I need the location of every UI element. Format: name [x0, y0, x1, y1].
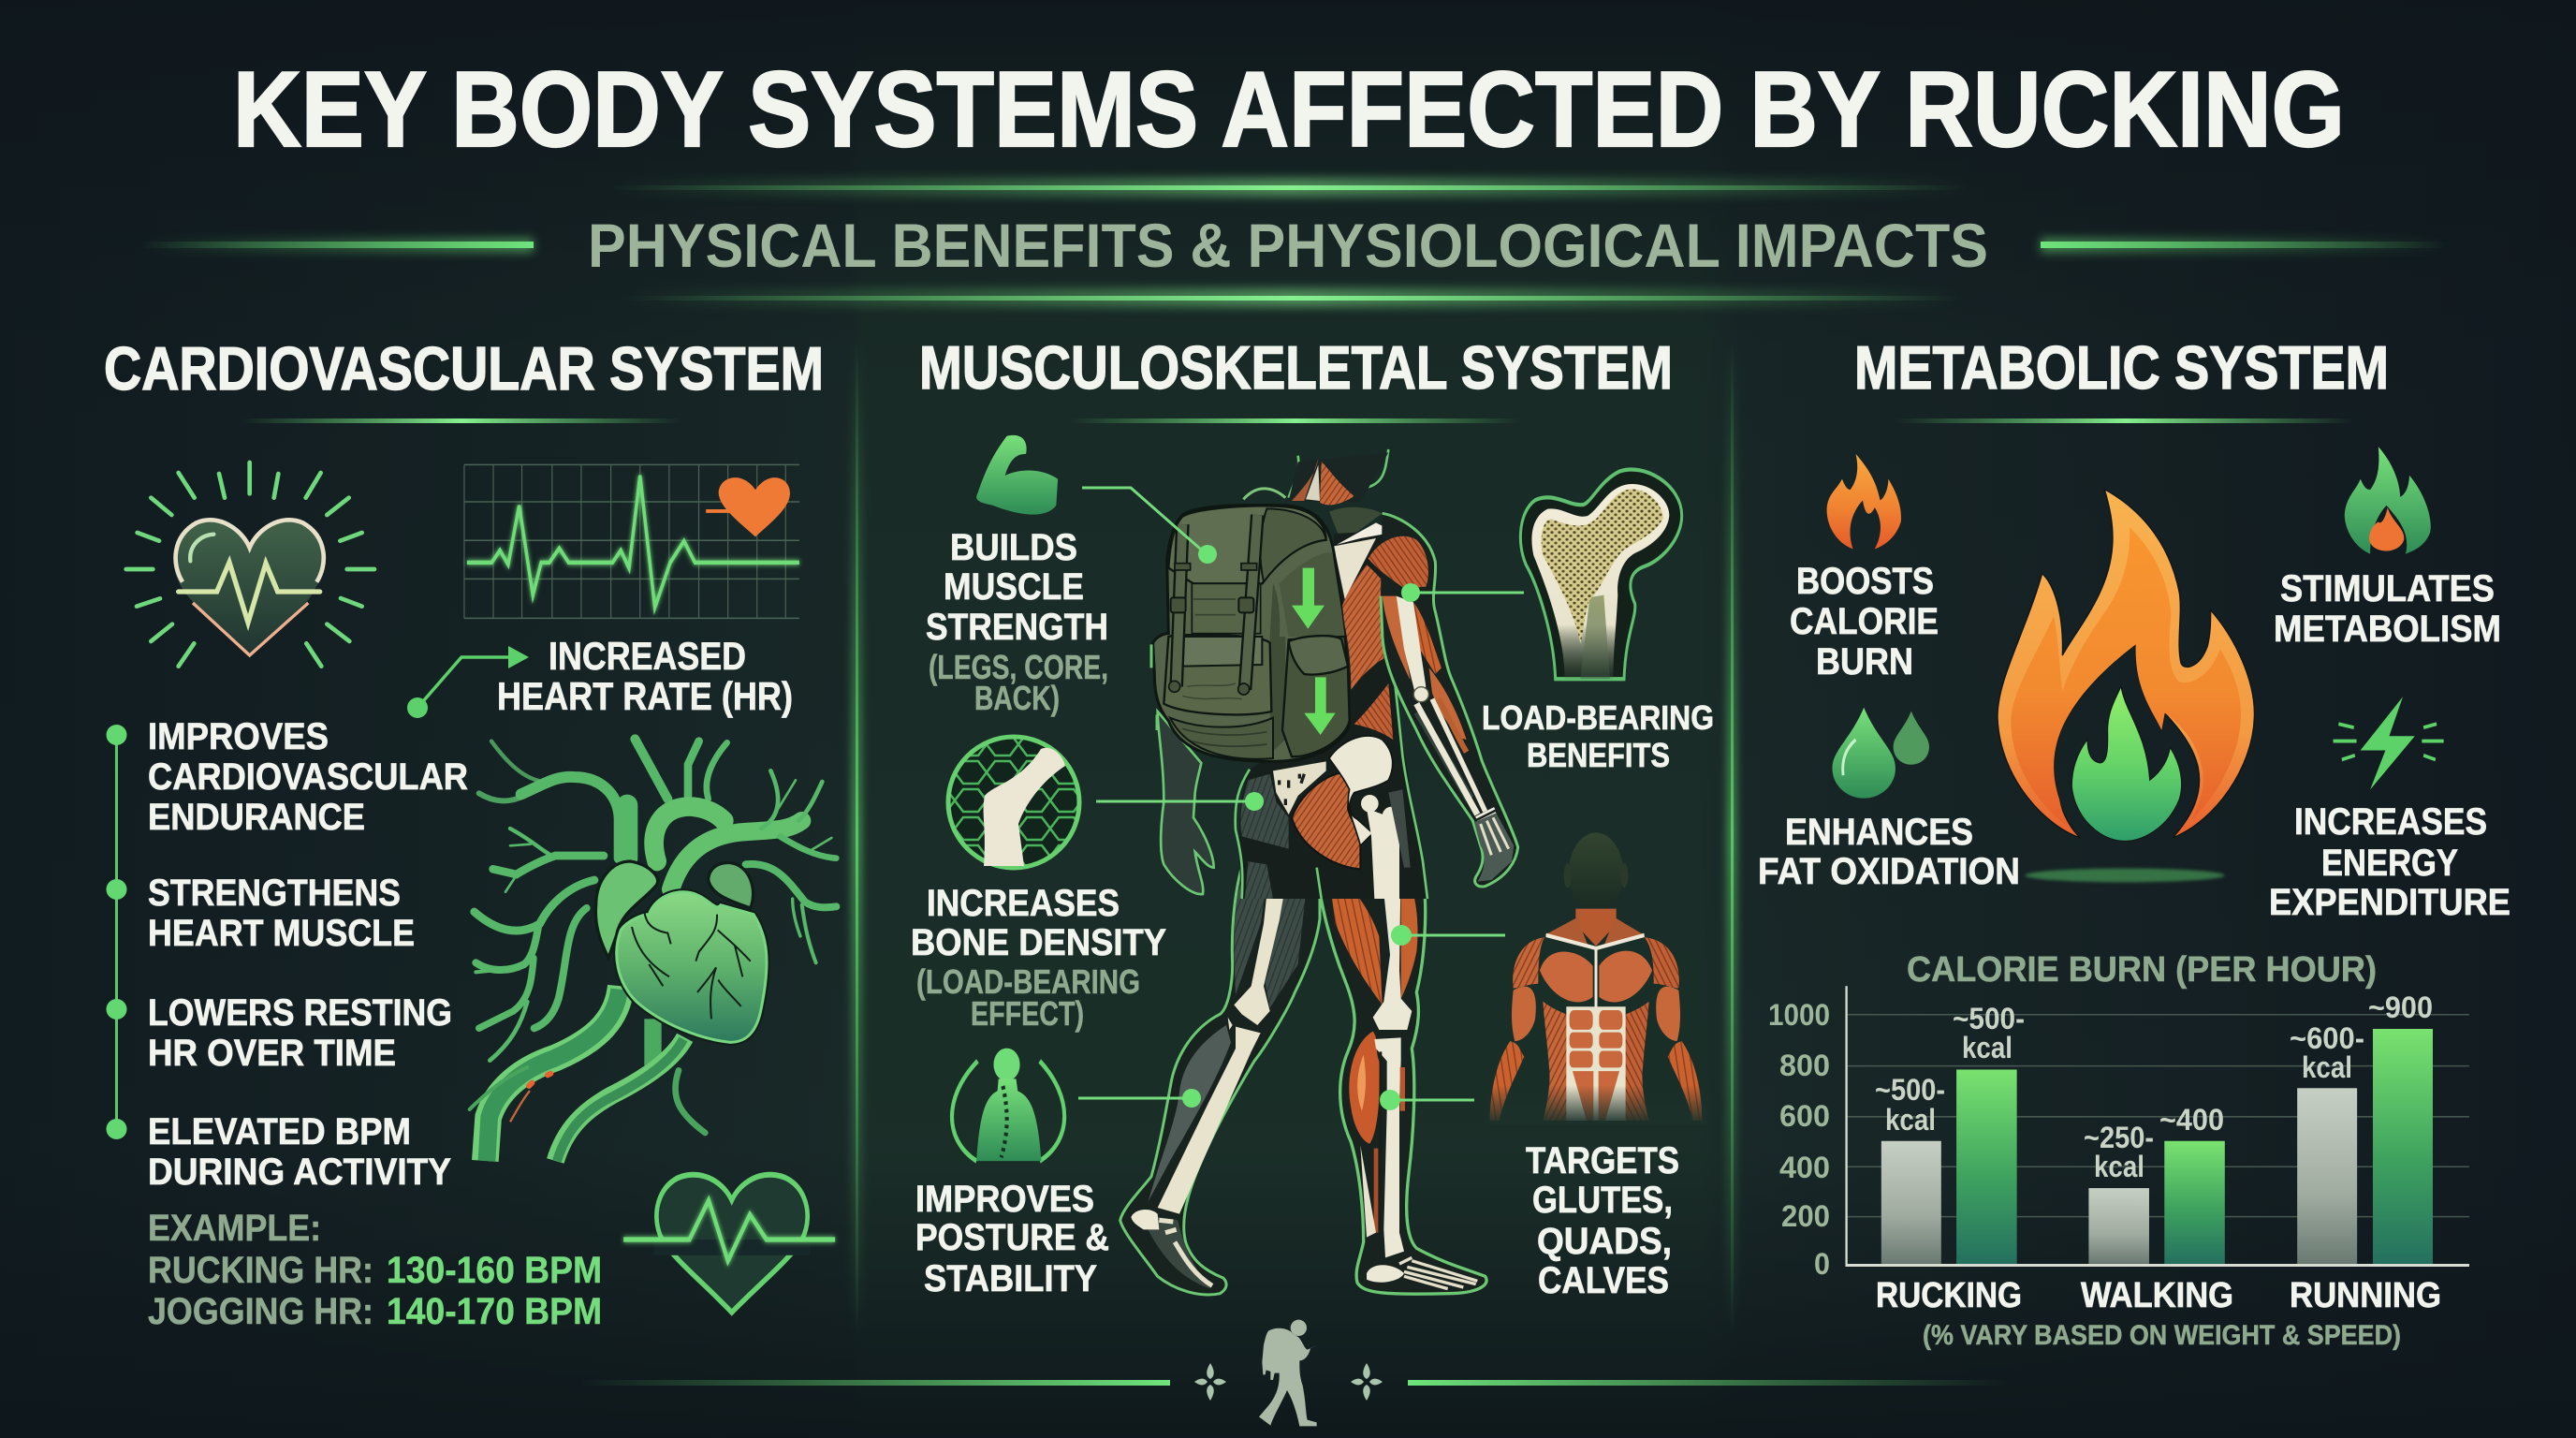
text: increases energy expenditure: EXPENDITURE: [2269, 882, 2510, 923]
text: improves cardiovascular endurance: ENDURANCE: [148, 797, 365, 838]
example heart rates: [148, 1208, 602, 1332]
example heart rates: 140-170 BPM: [387, 1291, 602, 1332]
example heart rates: EXAMPLE:: [148, 1208, 321, 1249]
callout lines and dots: [1078, 488, 1524, 1110]
text: increases energy expenditure: [2269, 801, 2510, 923]
text: increases bone density: (LOAD-BEARING: [916, 962, 1140, 1001]
text: improves posture and stability: [915, 1179, 1109, 1299]
chart: calorie burn per hour: [1768, 986, 2469, 1315]
text: stimulates metabolism: STIMULATES: [2280, 568, 2495, 609]
text: increases bone density: BONE DENSITY: [911, 922, 1166, 963]
text: load-bearing benefits: BENEFITS: [1527, 736, 1670, 774]
text: strengthens heart muscle: [148, 873, 415, 954]
icon: bone density circle: [948, 737, 1079, 868]
text: boosts calorie burn: [1790, 561, 1939, 682]
text: stimulates metabolism: METABOLISM: [2274, 609, 2501, 650]
text: builds muscle strength: MUSCLE: [944, 566, 1084, 608]
icon: lightning bolt: [2334, 697, 2444, 789]
y axis labels: [1768, 998, 1830, 1281]
illustration: anatomical heart with vessels: [470, 739, 836, 1161]
heading: musculoskeletal: MUSCULOSKELETAL SYSTEM: [919, 333, 1673, 402]
text: builds muscle strength: STRENGTH: [926, 607, 1108, 648]
lower glowing divider: [624, 288, 1963, 307]
text: load-bearing benefits: LOAD-BEARING: [1482, 698, 1714, 737]
icon: posture spine figure: [952, 1049, 1064, 1161]
text: elevated bpm: ELEVATED BPM: [148, 1111, 411, 1152]
y axis labels: 0: [1814, 1247, 1830, 1281]
text: improves posture and stability: STABILITY: [924, 1258, 1097, 1299]
icon: fat droplets: [1832, 708, 1929, 799]
icon: large flame: [1998, 490, 2254, 882]
text: enhances fat oxidation: ENHANCES: [1785, 812, 1973, 853]
label: increased heart rate: INCREASED: [549, 634, 746, 678]
y axis labels: 1000: [1768, 998, 1830, 1032]
text: strengthens heart muscle: STRENGTHENS: [148, 873, 401, 914]
bar value labels: kcal: [2094, 1150, 2144, 1183]
x axis labels: RUNNING: [2290, 1276, 2441, 1315]
bar value labels: ~900: [2368, 990, 2433, 1024]
x axis labels: RUCKING: [1876, 1276, 2022, 1315]
lower body: legs: [1120, 861, 1486, 1295]
heading divider: [1070, 418, 1520, 423]
bar value labels: kcal: [1885, 1103, 1936, 1137]
panel: musculoskeletal system: [911, 333, 1714, 1301]
text: elevated bpm: DURING ACTIVITY: [148, 1152, 451, 1193]
y axis labels: 600: [1779, 1099, 1830, 1133]
icon: heart pulse: [623, 1175, 835, 1313]
label: increased heart rate: HEART RATE (HR): [497, 674, 793, 718]
chart title: CALORIE BURN (PER HOUR): [1907, 950, 2377, 990]
text: boosts calorie burn: CALORIE: [1790, 601, 1939, 642]
text: increases bone density: INCREASES: [927, 883, 1120, 924]
upper body: neck, torso, arms, pelvis: [1158, 449, 1518, 899]
text: increases bone density: [911, 883, 1166, 1033]
text: lowers resting hr: LOWERS RESTING: [148, 992, 452, 1034]
y axis labels: 400: [1779, 1151, 1830, 1184]
text: elevated bpm: [148, 1111, 451, 1193]
chart axes and bars: [1847, 986, 2469, 1265]
text: builds muscle strength: [926, 527, 1108, 717]
title: KEY BODY SYSTEMS AFFECTED BY RUCKING: [233, 51, 2345, 169]
text: improves cardiovascular endurance: CARDIOVASCULAR: [148, 756, 468, 798]
icon: right sparkle: [1351, 1363, 1383, 1401]
text: increases energy expenditure: INCREASES: [2294, 801, 2487, 843]
text: improves cardiovascular endurance: IMPROVES: [148, 716, 329, 757]
heading divider: [242, 418, 681, 423]
text: builds muscle strength: (LEGS, CORE,: [929, 648, 1108, 686]
icon: small orange flame: [1827, 454, 1901, 549]
text: lowers resting hr: [148, 992, 452, 1074]
x axis labels: [1876, 1276, 2441, 1315]
illustration: femur cross-section: [1520, 469, 1682, 679]
text: improves cardiovascular endurance: [148, 716, 468, 838]
text: targets glutes quads calves: TARGETS: [1526, 1140, 1679, 1181]
bar value labels: ~500-: [1875, 1073, 1945, 1107]
panel: cardiovascular system: [104, 334, 836, 1332]
footer rule left: [580, 1380, 1170, 1386]
right subtitle rule: [2041, 238, 2448, 253]
icon: left sparkle: [1194, 1363, 1226, 1401]
bar value labels: ~600-: [2290, 1021, 2364, 1055]
text: enhances fat oxidation: FAT OXIDATION: [1758, 851, 2020, 892]
text: improves posture and stability: POSTURE &: [915, 1217, 1109, 1258]
subtitle: PHYSICAL BENEFITS & PHYSIOLOGICAL IMPACTS: [588, 211, 1988, 280]
bar value labels: ~250-: [2084, 1121, 2154, 1154]
icon: hiker silhouette: [1259, 1320, 1318, 1426]
text: load-bearing benefits: [1482, 698, 1714, 774]
example heart rates: JOGGING HR:: [148, 1291, 373, 1332]
text: builds muscle strength: BUILDS: [950, 527, 1077, 568]
bar value labels: ~400: [2159, 1103, 2224, 1137]
label: increased heart rate: [497, 634, 793, 718]
text: targets glutes quads calves: GLUTES,: [1532, 1180, 1673, 1221]
y axis labels: 800: [1779, 1049, 1830, 1082]
bar value labels: kcal: [2302, 1050, 2352, 1084]
heading: metabolic: METABOLIC SYSTEM: [1854, 333, 2389, 402]
x axis labels: WALKING: [2081, 1276, 2233, 1315]
text: increases energy expenditure: ENERGY: [2321, 843, 2458, 884]
footer: [580, 1320, 2007, 1426]
bar value labels: ~500-: [1953, 1002, 2025, 1035]
illustration: walking figure with backpack: [1120, 449, 1518, 1295]
text: improves posture and stability: IMPROVES: [915, 1179, 1094, 1220]
bar value labels: [1875, 990, 2433, 1183]
text: boosts calorie burn: BURN: [1816, 641, 1913, 682]
icon: green flame: [2345, 447, 2431, 554]
example heart rates: RUCKING HR:: [148, 1250, 373, 1291]
heading: cardiovascular: CARDIOVASCULAR SYSTEM: [104, 334, 824, 403]
text: targets glutes quads calves: CALVES: [1538, 1260, 1669, 1301]
timeline: [107, 725, 127, 1139]
top glowing divider: [607, 178, 1971, 197]
text: stimulates metabolism: [2274, 568, 2501, 650]
text: builds muscle strength: BACK): [974, 679, 1060, 717]
chart footnote: (% VARY BASED ON WEIGHT & SPEED): [1923, 1320, 2401, 1351]
panel: metabolic system: [1758, 333, 2510, 1351]
icon: flexed arm: [976, 435, 1058, 515]
text: strengthens heart muscle: HEART MUSCLE: [148, 913, 415, 954]
backpack: [1151, 489, 1350, 761]
icon: glowing heart with rays: [126, 462, 374, 667]
heading divider: [1896, 418, 2354, 423]
header: [139, 51, 2448, 307]
arrow to increased heart rate: [407, 646, 529, 718]
chart: ECG trace with orange heart: [464, 464, 799, 618]
text: targets glutes quads calves: [1526, 1140, 1679, 1301]
text: enhances fat oxidation: [1758, 812, 2020, 892]
footer rule right: [1408, 1380, 2007, 1386]
text: increases bone density: EFFECT): [971, 994, 1084, 1033]
left subtitle rule: [139, 238, 534, 253]
text: boosts calorie burn: BOOSTS: [1796, 561, 1934, 602]
y axis labels: 200: [1781, 1199, 1830, 1233]
text: targets glutes quads calves: QUADS,: [1537, 1221, 1672, 1262]
text: lowers resting hr: HR OVER TIME: [148, 1033, 396, 1074]
example heart rates: 130-160 BPM: [387, 1250, 602, 1291]
illustration: muscular torso: [1488, 832, 1706, 1125]
bar value labels: kcal: [1962, 1031, 2012, 1064]
